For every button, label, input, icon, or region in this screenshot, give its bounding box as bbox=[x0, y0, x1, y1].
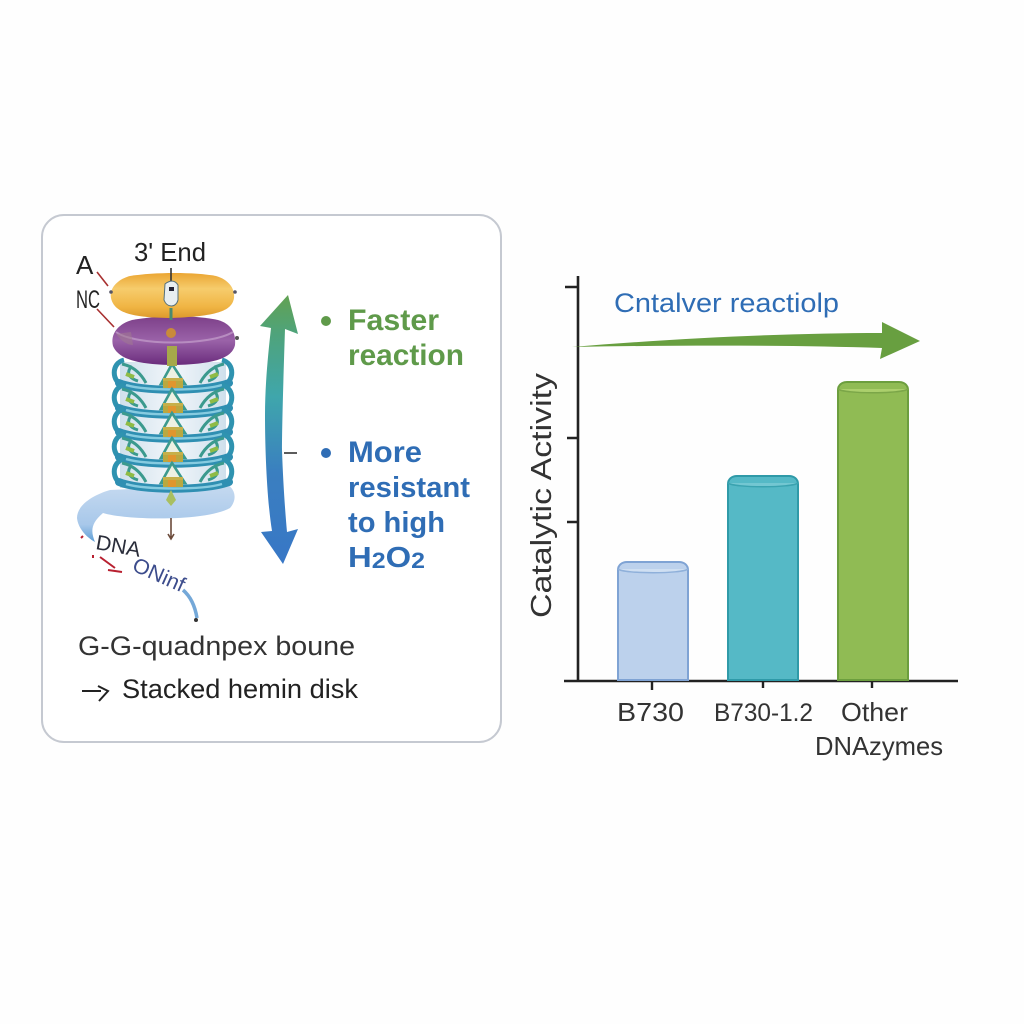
label: DNA: DNA bbox=[94, 531, 142, 562]
x label: Other DNAzymes: DNAzymes bbox=[815, 731, 943, 761]
callout: more resistant to high H2O2: H bbox=[348, 542, 369, 574]
callout: more resistant to high H2O2: resistant bbox=[348, 472, 470, 504]
bar chart: catalytic activity bbox=[526, 276, 958, 761]
lower DNA strand bbox=[183, 590, 197, 618]
bar: B730 bbox=[618, 562, 688, 680]
axes bbox=[564, 276, 958, 690]
bar: Other DNAzymes bbox=[838, 382, 908, 680]
label: ONinf: ONinf bbox=[129, 554, 189, 597]
x label: B730: B730 bbox=[617, 697, 684, 727]
callout: more resistant to high H2O2: 2 bbox=[411, 548, 425, 573]
panel: G-quadruplex structure bbox=[42, 215, 501, 742]
purple hemin disk bbox=[112, 316, 239, 366]
callout: faster reaction bbox=[321, 304, 464, 372]
bar: B730-1.2 bbox=[728, 476, 798, 680]
helix tiers bbox=[114, 360, 232, 489]
legend: stacked hemin disk: Stacked hemin disk bbox=[122, 674, 358, 704]
legend: G-quadruplex: G-G-quadnpex boune bbox=[78, 631, 355, 661]
red connector marks bbox=[81, 536, 122, 572]
arrow label: Cntalver reactiolp bbox=[614, 288, 839, 318]
DNA base and tail bbox=[77, 484, 235, 542]
callout: faster reaction: Faster bbox=[348, 304, 439, 337]
y axis label: Catalytic Activity bbox=[526, 372, 558, 618]
label: A: A bbox=[76, 250, 94, 280]
callout: more resistant to high H2O2: 2 bbox=[372, 548, 386, 573]
x label: Other DNAzymes bbox=[815, 697, 943, 761]
central axis bbox=[166, 490, 176, 506]
orange hemin disk bbox=[109, 268, 237, 320]
callout: more resistant to high H2O2: O bbox=[386, 542, 411, 574]
x label: B730-1.2: B730-1.2 bbox=[714, 699, 813, 727]
arrow: catalytic trend bbox=[572, 322, 920, 359]
callout: more resistant to high H2O2: More bbox=[348, 436, 422, 469]
x label: Other DNAzymes: Other bbox=[841, 697, 908, 727]
callout: faster reaction: reaction bbox=[348, 339, 464, 372]
label: NC: NC bbox=[76, 286, 100, 314]
label: 3' End: 3' End bbox=[134, 237, 206, 267]
icon: G-quadruplex hemin stack illustration bbox=[77, 268, 239, 622]
arrow: double-headed gradient arrow bbox=[260, 295, 298, 564]
callout: more resistant to high H2O2: to high bbox=[348, 507, 445, 539]
quadruplex core bbox=[120, 362, 226, 488]
callout: more resistant to high H2O2 bbox=[321, 436, 470, 574]
